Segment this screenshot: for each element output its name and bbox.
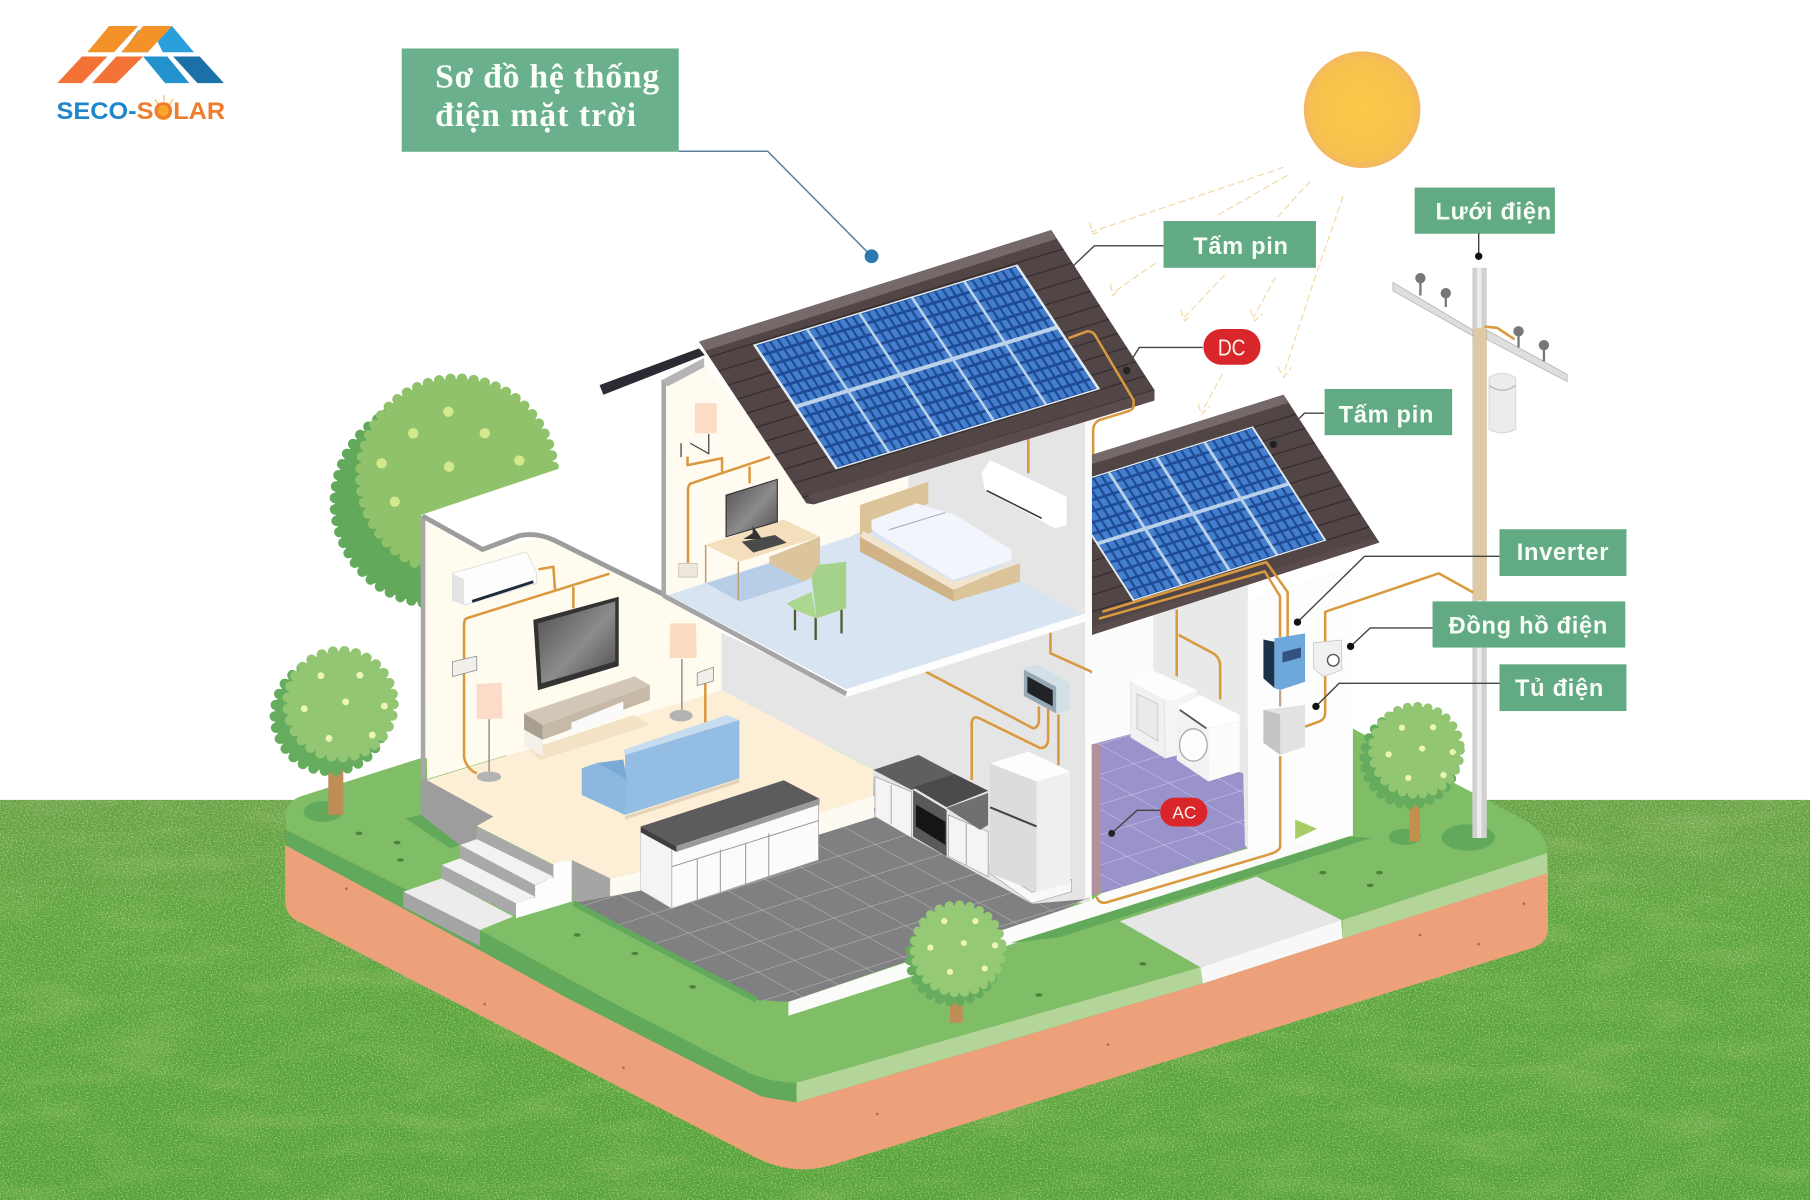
wall lamp bbox=[681, 403, 717, 457]
front tree bbox=[910, 905, 1002, 1023]
leader: electric meter bbox=[1347, 628, 1433, 650]
solar panel array lower bbox=[1092, 426, 1326, 601]
wall sockets bbox=[452, 656, 713, 686]
sidewalk bbox=[1120, 877, 1342, 983]
label: grid: Lưới điện bbox=[1436, 199, 1552, 225]
lawn surface bbox=[285, 727, 1547, 1083]
television bbox=[533, 597, 619, 690]
washing machine bbox=[1177, 695, 1240, 781]
back wall white bbox=[1092, 612, 1154, 750]
soil specks bbox=[345, 887, 1525, 1115]
dark lawn wedge by plinth bbox=[405, 815, 460, 848]
oven bbox=[913, 790, 947, 856]
roof wiring bbox=[1099, 562, 1288, 637]
upper floor bbox=[661, 358, 1092, 697]
counter tops bbox=[873, 755, 955, 790]
leader: AC bbox=[1108, 810, 1160, 837]
wall electrical panel bbox=[1024, 665, 1070, 713]
logo wordmark: SECO- SOLAR bbox=[57, 99, 225, 125]
upper pillar bbox=[1085, 417, 1092, 619]
white kerb under floor bbox=[640, 795, 875, 891]
tv stand bbox=[524, 676, 650, 756]
title callout: Sơ đồ hệ thống bbox=[435, 59, 659, 96]
wall wiring bbox=[464, 567, 721, 773]
sun rays bbox=[1090, 167, 1343, 414]
refrigerator bbox=[990, 751, 1072, 903]
title leader bbox=[679, 151, 878, 263]
label: solar panel lower bbox=[1325, 389, 1452, 435]
green arrow marker bbox=[1295, 820, 1317, 839]
air conditioner upper bbox=[982, 460, 1067, 528]
leader: grid bbox=[1475, 233, 1482, 260]
patio corner by fridge bbox=[875, 817, 1085, 937]
ground floor: living room bbox=[421, 516, 1092, 903]
label: electric meter: Đồng hồ điện bbox=[1449, 614, 1608, 640]
label: solar panel lower: Tấm pin bbox=[1339, 402, 1434, 428]
computer monitor bbox=[726, 479, 777, 539]
roof surface bbox=[699, 230, 1155, 504]
right cabinets bbox=[948, 815, 988, 877]
inverter bbox=[1263, 633, 1305, 690]
label: solar panel upper bbox=[1164, 221, 1316, 268]
badge: AC bbox=[1160, 798, 1207, 826]
badge: DC bbox=[1203, 329, 1261, 365]
island base bbox=[285, 727, 1548, 1169]
label: distribution box: Tủ điện bbox=[1515, 676, 1604, 702]
grey under floor bbox=[572, 860, 610, 903]
outer white wall bbox=[1248, 566, 1353, 852]
white sky background bbox=[0, 0, 1810, 801]
leader: distribution box bbox=[1312, 683, 1499, 710]
transformer bbox=[1489, 373, 1516, 433]
lower roof bbox=[1061, 395, 1379, 637]
wire inverter to box bbox=[1279, 690, 1281, 706]
upper back wall cream bbox=[667, 364, 912, 595]
label: grid bbox=[1415, 188, 1555, 234]
dark lawn strip bbox=[1010, 837, 1371, 943]
label: inverter bbox=[1499, 529, 1626, 576]
left wall bbox=[424, 519, 721, 779]
dc wire bbox=[1068, 331, 1134, 619]
left floor lamp bbox=[477, 683, 503, 782]
left tree bbox=[275, 651, 394, 822]
label: inverter: Inverter bbox=[1517, 540, 1609, 566]
wall socket upper bbox=[679, 563, 697, 577]
logo mark bbox=[57, 26, 224, 83]
label: distribution box bbox=[1499, 664, 1626, 711]
stair steps bbox=[477, 826, 553, 878]
title callout: điện mặt trời bbox=[435, 97, 636, 134]
air conditioner living bbox=[452, 552, 537, 605]
rear wall lower bbox=[721, 619, 1085, 898]
kitchen range and cabinets bbox=[873, 755, 988, 877]
leader: solar panel upper bbox=[1071, 246, 1164, 268]
electric meter bbox=[1313, 640, 1342, 677]
roof lower edge bbox=[808, 390, 1154, 504]
grey plinth bbox=[421, 776, 493, 845]
dryer bbox=[1131, 671, 1197, 758]
floor behind kitchen units bbox=[873, 770, 1091, 905]
lawn side strip bbox=[285, 815, 796, 1102]
distribution box bbox=[1263, 705, 1305, 755]
logo sun bbox=[149, 95, 179, 120]
sun bbox=[1304, 51, 1420, 168]
upper floor slab bbox=[668, 508, 1085, 689]
laundry room and right wing bbox=[1092, 566, 1353, 983]
leader: solar panel lower bbox=[1270, 413, 1324, 448]
laundry wiring bbox=[1097, 609, 1280, 903]
leader: DC bbox=[1123, 347, 1203, 374]
insulators bbox=[1415, 273, 1549, 361]
soil side bbox=[285, 845, 1548, 1169]
big tree behind house bbox=[335, 379, 665, 646]
desk bbox=[706, 519, 820, 602]
badge: DC: DC bbox=[1218, 335, 1246, 361]
kitchen island bbox=[641, 780, 820, 908]
title callout bbox=[402, 48, 679, 152]
label: solar panel upper: Tấm pin bbox=[1193, 234, 1289, 260]
right tree bbox=[1364, 706, 1460, 845]
upper right wall grey bbox=[908, 417, 1085, 619]
grid wire bbox=[1305, 573, 1473, 727]
upper wall wiring bbox=[688, 433, 1028, 568]
back wall grey bbox=[1153, 583, 1248, 848]
main roof bbox=[600, 230, 1155, 504]
lawn specks bbox=[356, 791, 1383, 997]
cross arm bbox=[1393, 282, 1567, 381]
grass field bbox=[0, 800, 1810, 1200]
badge: AC: AC bbox=[1172, 802, 1196, 822]
bed bbox=[860, 482, 1020, 601]
left cabinets bbox=[875, 777, 912, 838]
gable eave bbox=[600, 348, 705, 395]
sofa bbox=[582, 715, 739, 820]
stairs bbox=[403, 826, 572, 947]
stair side wall bbox=[516, 860, 572, 918]
purple floor bbox=[1092, 734, 1245, 893]
utility pole bbox=[1393, 268, 1567, 851]
rug under stand bbox=[528, 715, 650, 760]
lawn front lip bbox=[796, 853, 1547, 1102]
white curb and front wall base bbox=[788, 808, 1351, 1016]
chair bbox=[787, 562, 846, 640]
roof ridge highlight bbox=[699, 230, 1056, 351]
kitchen wiring bbox=[926, 630, 1097, 780]
label: electric meter bbox=[1433, 601, 1625, 648]
logo bbox=[57, 26, 225, 125]
right floor lamp bbox=[670, 623, 697, 721]
leader: inverter bbox=[1294, 556, 1499, 626]
patio tiled floor bbox=[573, 808, 1091, 1002]
living floor bbox=[427, 690, 873, 878]
solar panel array upper bbox=[755, 265, 1099, 469]
